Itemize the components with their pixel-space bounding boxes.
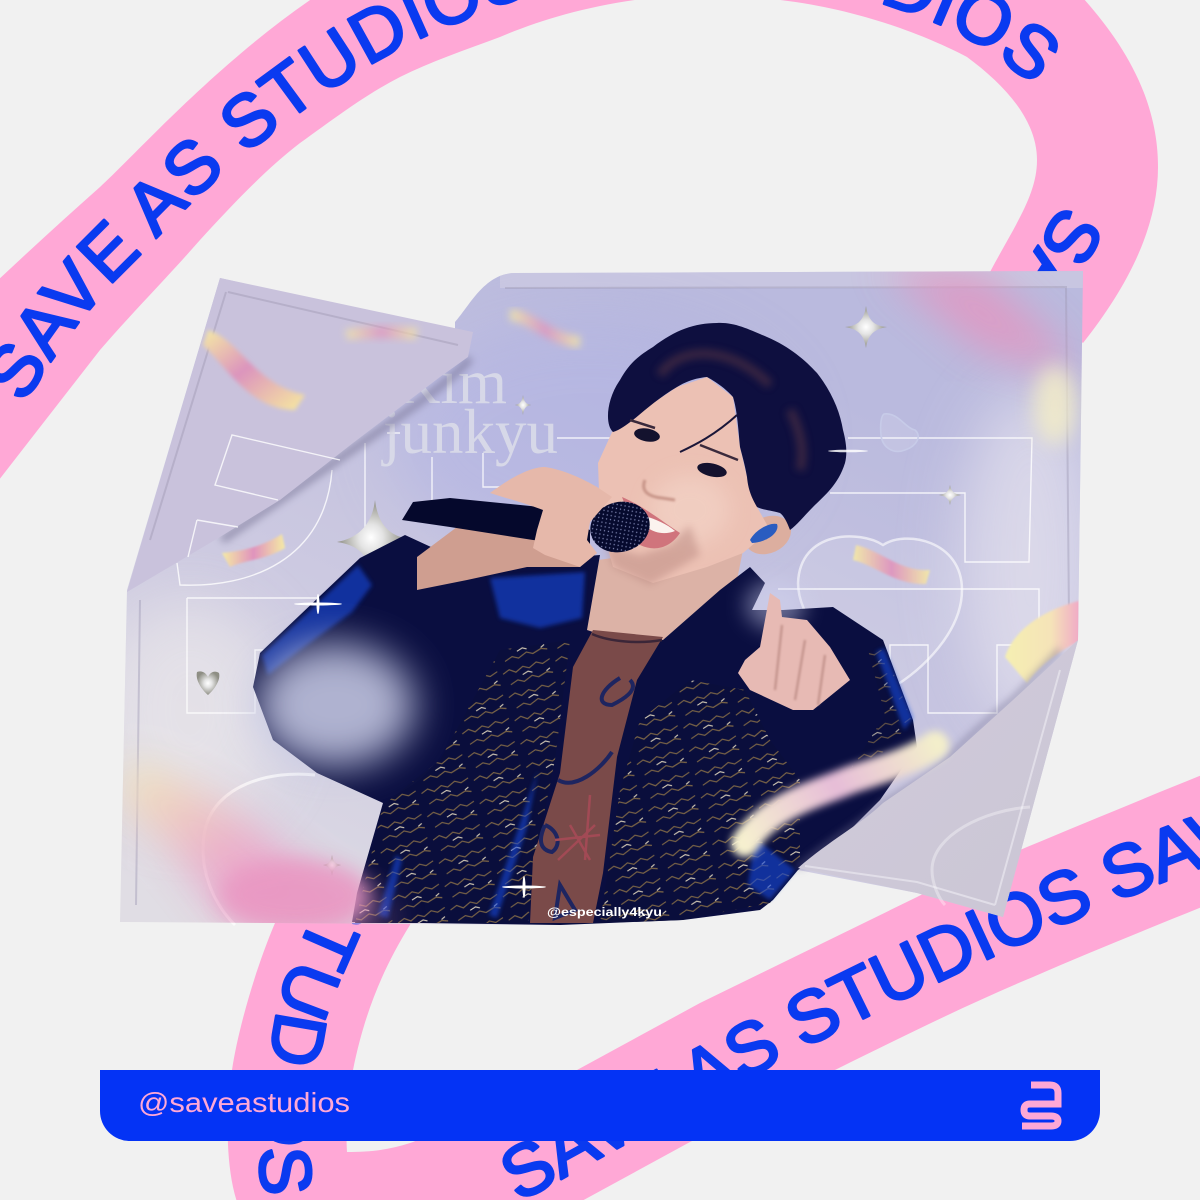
blanket	[100, 265, 1100, 925]
confetti: bottom-right blurred ribbon	[745, 745, 935, 843]
sparkle: big left	[337, 500, 405, 575]
confetti: top centre	[510, 315, 580, 342]
finger lines	[775, 625, 825, 705]
face	[598, 377, 770, 583]
shirt print	[541, 678, 633, 918]
name text: Kim	[395, 347, 507, 417]
fingers	[490, 467, 612, 567]
ear	[739, 509, 797, 561]
flap outline lettering	[188, 435, 340, 557]
flap confetti	[203, 330, 305, 410]
flap hem	[805, 670, 1060, 905]
jaw shadow	[605, 525, 700, 585]
fringe strands	[680, 415, 737, 452]
ribbon: lower loop: STUDIOS	[258, 924, 362, 1194]
smile	[622, 497, 680, 548]
bubble heart: right	[798, 536, 962, 692]
star flare: shoulder	[294, 594, 342, 614]
outline lettering	[177, 433, 1039, 713]
nose	[644, 480, 675, 500]
confetti: bottom-left blurred ribbon	[125, 760, 400, 925]
confetti: top-right yellow blur	[1033, 365, 1077, 445]
sparkle: top right	[845, 306, 887, 348]
hair highlight	[660, 354, 802, 470]
collar glow	[745, 580, 805, 630]
face highlight	[650, 475, 730, 545]
shirt	[530, 630, 663, 923]
fold shadow	[222, 358, 470, 540]
small bubble heart	[881, 414, 918, 451]
pointing hand	[738, 593, 850, 710]
blurred ribbons over blanket	[125, 760, 400, 930]
confetti: top-right pink blur	[880, 265, 1070, 375]
handle text: @saveastudios	[138, 1087, 350, 1118]
flap: lower right fold	[798, 640, 1078, 917]
flap: top left fold	[127, 278, 473, 592]
blanket base	[120, 271, 1083, 925]
forearm	[417, 527, 597, 590]
credit text: @especially4kyu	[547, 905, 662, 919]
sparkle: name	[515, 395, 531, 415]
jacket pattern: right sleeve	[850, 650, 912, 770]
confetti: bottom-left pink core	[220, 860, 370, 930]
confetti and blurs inside blanket	[222, 265, 1082, 683]
teeth	[645, 516, 675, 533]
sleeve glow	[255, 643, 415, 767]
silver heart	[197, 671, 219, 695]
shirt neckline	[592, 634, 662, 642]
bubble heart: lower left	[203, 774, 315, 925]
shirt star	[555, 795, 600, 860]
blue sheen	[262, 565, 913, 918]
confetti: under fold	[222, 534, 285, 567]
star flare: shirt	[502, 876, 546, 898]
logo mark	[1022, 1085, 1058, 1126]
blanket tints	[100, 271, 1100, 820]
ribbon: top arc: SA	[1032, 210, 1100, 272]
jacket pattern: right	[600, 680, 800, 923]
confetti: right yellow	[1005, 600, 1082, 683]
mic head	[585, 495, 655, 559]
right brow and eye	[696, 445, 738, 479]
flap confetti: hem	[345, 326, 418, 340]
confetti inside heart	[853, 545, 930, 584]
jacket pattern: left	[355, 640, 570, 923]
footer bar	[100, 1070, 1100, 1141]
name text: junkyu	[381, 397, 558, 467]
name text	[381, 347, 558, 467]
person	[253, 323, 917, 925]
hair	[608, 323, 846, 530]
neck	[585, 540, 745, 645]
mic handle	[402, 498, 590, 545]
ribbon: top arc	[0, 0, 1158, 478]
sparkle: right	[939, 485, 961, 505]
star flare: hair	[828, 450, 868, 452]
sparkle: lower	[323, 855, 341, 876]
left brow and eye	[630, 420, 661, 444]
flap hem	[150, 292, 458, 540]
bubble on flap	[932, 807, 1030, 905]
stitched hem	[136, 287, 1069, 905]
jacket	[253, 535, 917, 925]
earpiece	[750, 524, 777, 543]
